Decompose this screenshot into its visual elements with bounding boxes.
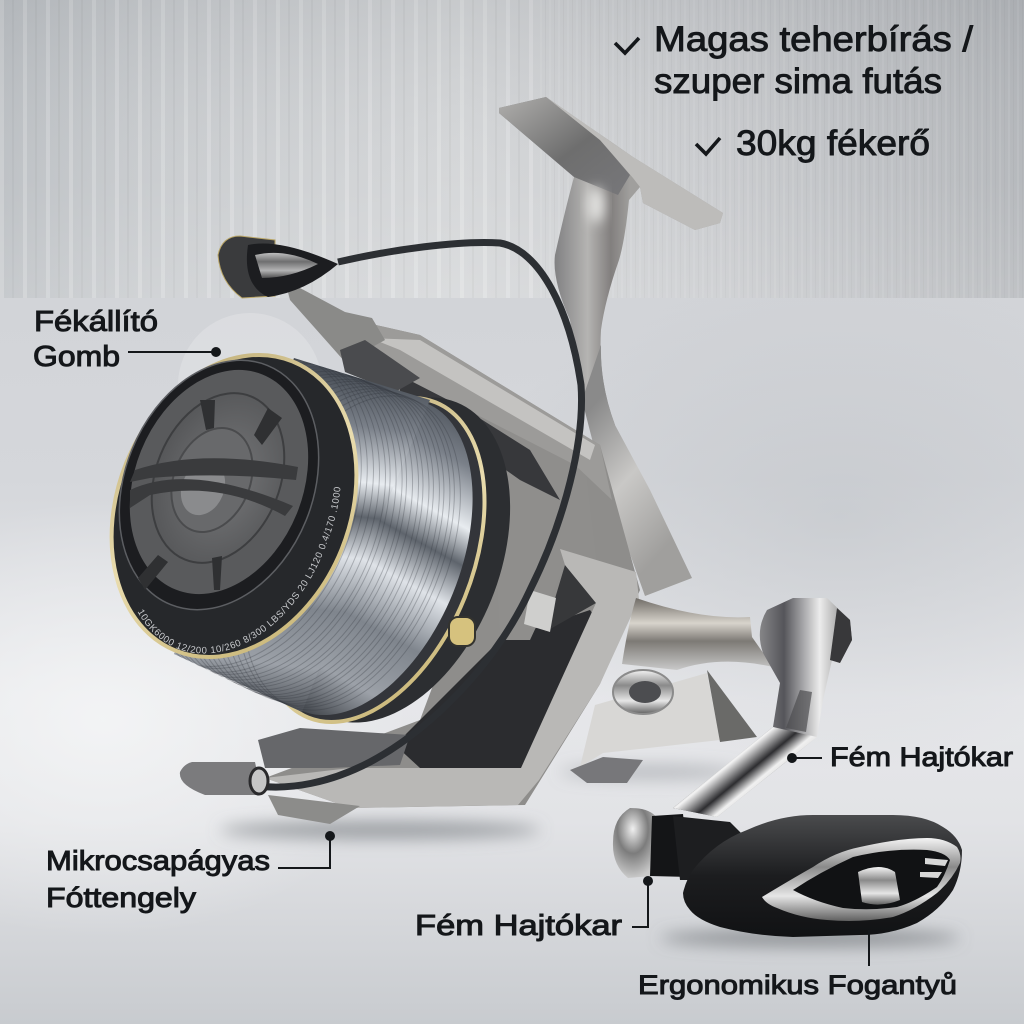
reel: stem light edge: [546, 97, 723, 230]
reel: chrome ball: [613, 808, 657, 878]
reel: stem: [499, 97, 723, 450]
reel: spool front face: [110, 353, 358, 659]
check icon: [696, 138, 720, 154]
reel: handle knob: [683, 815, 962, 937]
callout: drag knob: Gomb: [33, 341, 120, 373]
reel: knob inner chrome: [858, 867, 900, 905]
callout: main shaft: [46, 831, 335, 913]
reel: spool cylinder: [174, 358, 515, 747]
reel: stem highlight: [588, 187, 604, 223]
callout: ergonomic grip: Ergonomikus Fogantyů: [638, 970, 957, 1000]
reel: gold screw: [449, 617, 475, 646]
callout: main shaft: Mikrocsapágyas: [46, 845, 270, 876]
feature: high load capacity: [615, 20, 973, 101]
reel: rear flange: [216, 365, 528, 755]
reel: knob inlay window: [793, 850, 950, 909]
reel: bail wire: [258, 242, 582, 787]
callout: main shaft: Fóttengely: [46, 882, 196, 913]
floor shadow: [220, 765, 960, 947]
reel: frame band: [265, 549, 639, 808]
reel: stem lower leg: [582, 345, 692, 596]
reel: dark wedge: [707, 670, 757, 742]
reel: rotor bracket: [340, 340, 420, 392]
reel: crank lower arm: [673, 727, 817, 817]
reel: lower chrome parts: [258, 728, 410, 768]
reel: rail light strip: [370, 338, 595, 460]
background floor: [0, 298, 1024, 1024]
reel: drag knob bars: [130, 458, 298, 516]
reel: roller highlight: [255, 253, 318, 278]
reel: bearing centre: [629, 681, 661, 703]
feature: 30kg drag: 30kg fékerő: [736, 124, 930, 163]
reel: translucent disc behind spool: [178, 313, 322, 457]
reel: dark triangle: [545, 565, 596, 632]
check icon: [615, 38, 639, 53]
reel: handle dark cap: [830, 608, 852, 663]
reel: dark interior: [395, 610, 612, 770]
reel: mid gear housing: [490, 420, 600, 640]
reel: stem top head: [499, 97, 630, 195]
reel: spool grooves: [174, 358, 461, 710]
reel: dark slot under rail: [400, 368, 560, 500]
callout: metal crank lower: [415, 876, 653, 942]
reel: rear collar: [231, 363, 555, 757]
reel: knob chrome inlay: [762, 838, 961, 921]
reel: bail roller cylinder: [218, 236, 275, 298]
reel: ring lettering: 10GK6000 12/200 10/260 8/300 LBS/YDS 20 LJ120 0.4/170 .1000: [138, 487, 340, 654]
reel: handle hub: [622, 598, 773, 670]
reel: notches: [138, 400, 282, 590]
reel: hub cap: [173, 454, 233, 522]
reel: bail arm: [285, 280, 385, 362]
background wall with vertical ribs: [0, 0, 1024, 300]
reel: foot arch: [570, 757, 643, 783]
reel: handle arm: [673, 598, 852, 817]
callout: metal crank upper: Fém Hajtókar: [830, 742, 1013, 772]
feature: high load capacity: Magas teherbírás /: [654, 20, 973, 59]
reel: knob window prongs: [920, 858, 948, 878]
feature: high load capacity: szuper sima futás: [654, 62, 942, 101]
reel: face hub: [157, 416, 267, 544]
reel: grip collar: [650, 814, 690, 877]
reel: crank bend shading: [786, 690, 812, 732]
reel: foot tab: [268, 795, 360, 824]
reel: face inner ring: [84, 330, 354, 640]
callout: drag knob: [33, 306, 221, 373]
reel: grip neck: [673, 816, 748, 880]
reel: face groove ring: [128, 373, 308, 583]
reel: rail: [345, 318, 612, 500]
reel: roller chrome teardrop: [247, 244, 338, 297]
reel: gear detail: [524, 590, 556, 632]
reel: body silhouette: [265, 318, 640, 808]
reel: foot pill: [180, 762, 262, 795]
reel: bearing: [613, 670, 673, 714]
callout: drag knob: Fékállító: [34, 306, 158, 338]
fishing reel: [110, 97, 962, 937]
reel: lower bail clamp: [250, 768, 268, 794]
reel: face inner disc: [98, 343, 340, 621]
callout: metal crank lower: Fém Hajtókar: [415, 910, 622, 942]
reel: rear silver leg: [580, 673, 720, 767]
